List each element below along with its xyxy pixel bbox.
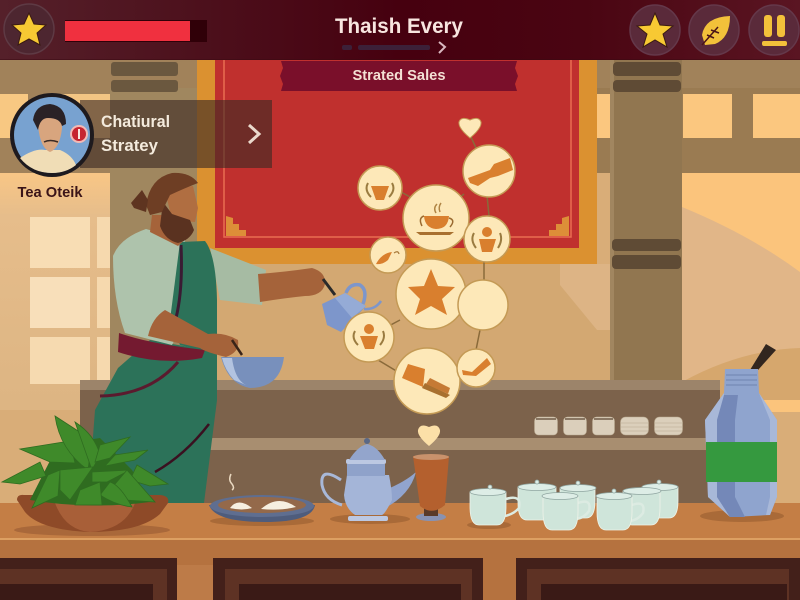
dish with food xyxy=(209,474,315,526)
upper wall beams and panes xyxy=(0,60,800,173)
right sleeve xyxy=(210,248,266,305)
star badge left xyxy=(4,4,54,54)
shelf cups and plates xyxy=(534,417,682,435)
hair xyxy=(146,173,198,215)
left lattice window xyxy=(30,217,110,384)
pitcher xyxy=(322,279,381,332)
node: star xyxy=(396,259,466,329)
node: empty xyxy=(458,280,508,330)
right forearm xyxy=(258,268,325,302)
beard xyxy=(160,202,194,243)
avatar badge xyxy=(70,125,88,143)
node: tea cup xyxy=(403,185,469,251)
right pillar xyxy=(610,60,682,382)
potted tea plant xyxy=(2,416,170,536)
back shelf xyxy=(80,380,720,505)
node: figure right xyxy=(464,216,510,262)
bowl xyxy=(221,340,284,388)
avatar portrait xyxy=(10,93,94,177)
star button xyxy=(630,5,680,55)
wooden table xyxy=(0,503,800,600)
ribbon xyxy=(280,61,518,91)
head and neck xyxy=(150,215,190,246)
skirt xyxy=(88,340,217,503)
green sash xyxy=(170,241,217,354)
heart bottom xyxy=(418,426,440,446)
node: basket xyxy=(358,166,402,210)
strategy info panel xyxy=(80,100,272,168)
chevron xyxy=(249,125,259,143)
heart top xyxy=(459,118,481,138)
health bar xyxy=(65,20,207,42)
connector lines xyxy=(378,135,489,372)
green bottle xyxy=(700,344,784,522)
cabinets xyxy=(0,558,800,600)
node: figure left xyxy=(344,312,394,362)
ribbon label: Strated Sales xyxy=(352,67,446,84)
top status bar xyxy=(0,0,800,60)
strategy node network xyxy=(344,118,515,446)
node: shake xyxy=(463,145,515,197)
maroon belt xyxy=(118,333,205,361)
subtitle progress dots xyxy=(342,42,445,53)
node: check xyxy=(457,349,495,387)
left pillar xyxy=(110,62,197,388)
panel text: Chatiural xyxy=(101,113,170,131)
shirt xyxy=(113,229,190,345)
panel text: Stratey xyxy=(101,137,159,155)
tea server figure xyxy=(88,173,381,503)
copper tumbler xyxy=(413,454,449,521)
node: packet xyxy=(394,348,460,414)
blue teapot xyxy=(322,438,416,524)
red hanging banner xyxy=(197,60,597,264)
avatar name: Tea Oteik xyxy=(18,184,83,201)
title: Thaish Every xyxy=(335,15,463,38)
node: leaf xyxy=(370,237,406,273)
alert button xyxy=(749,5,799,55)
celadon cups xyxy=(467,480,678,530)
leaf button xyxy=(689,5,739,55)
left forearm xyxy=(148,310,238,357)
